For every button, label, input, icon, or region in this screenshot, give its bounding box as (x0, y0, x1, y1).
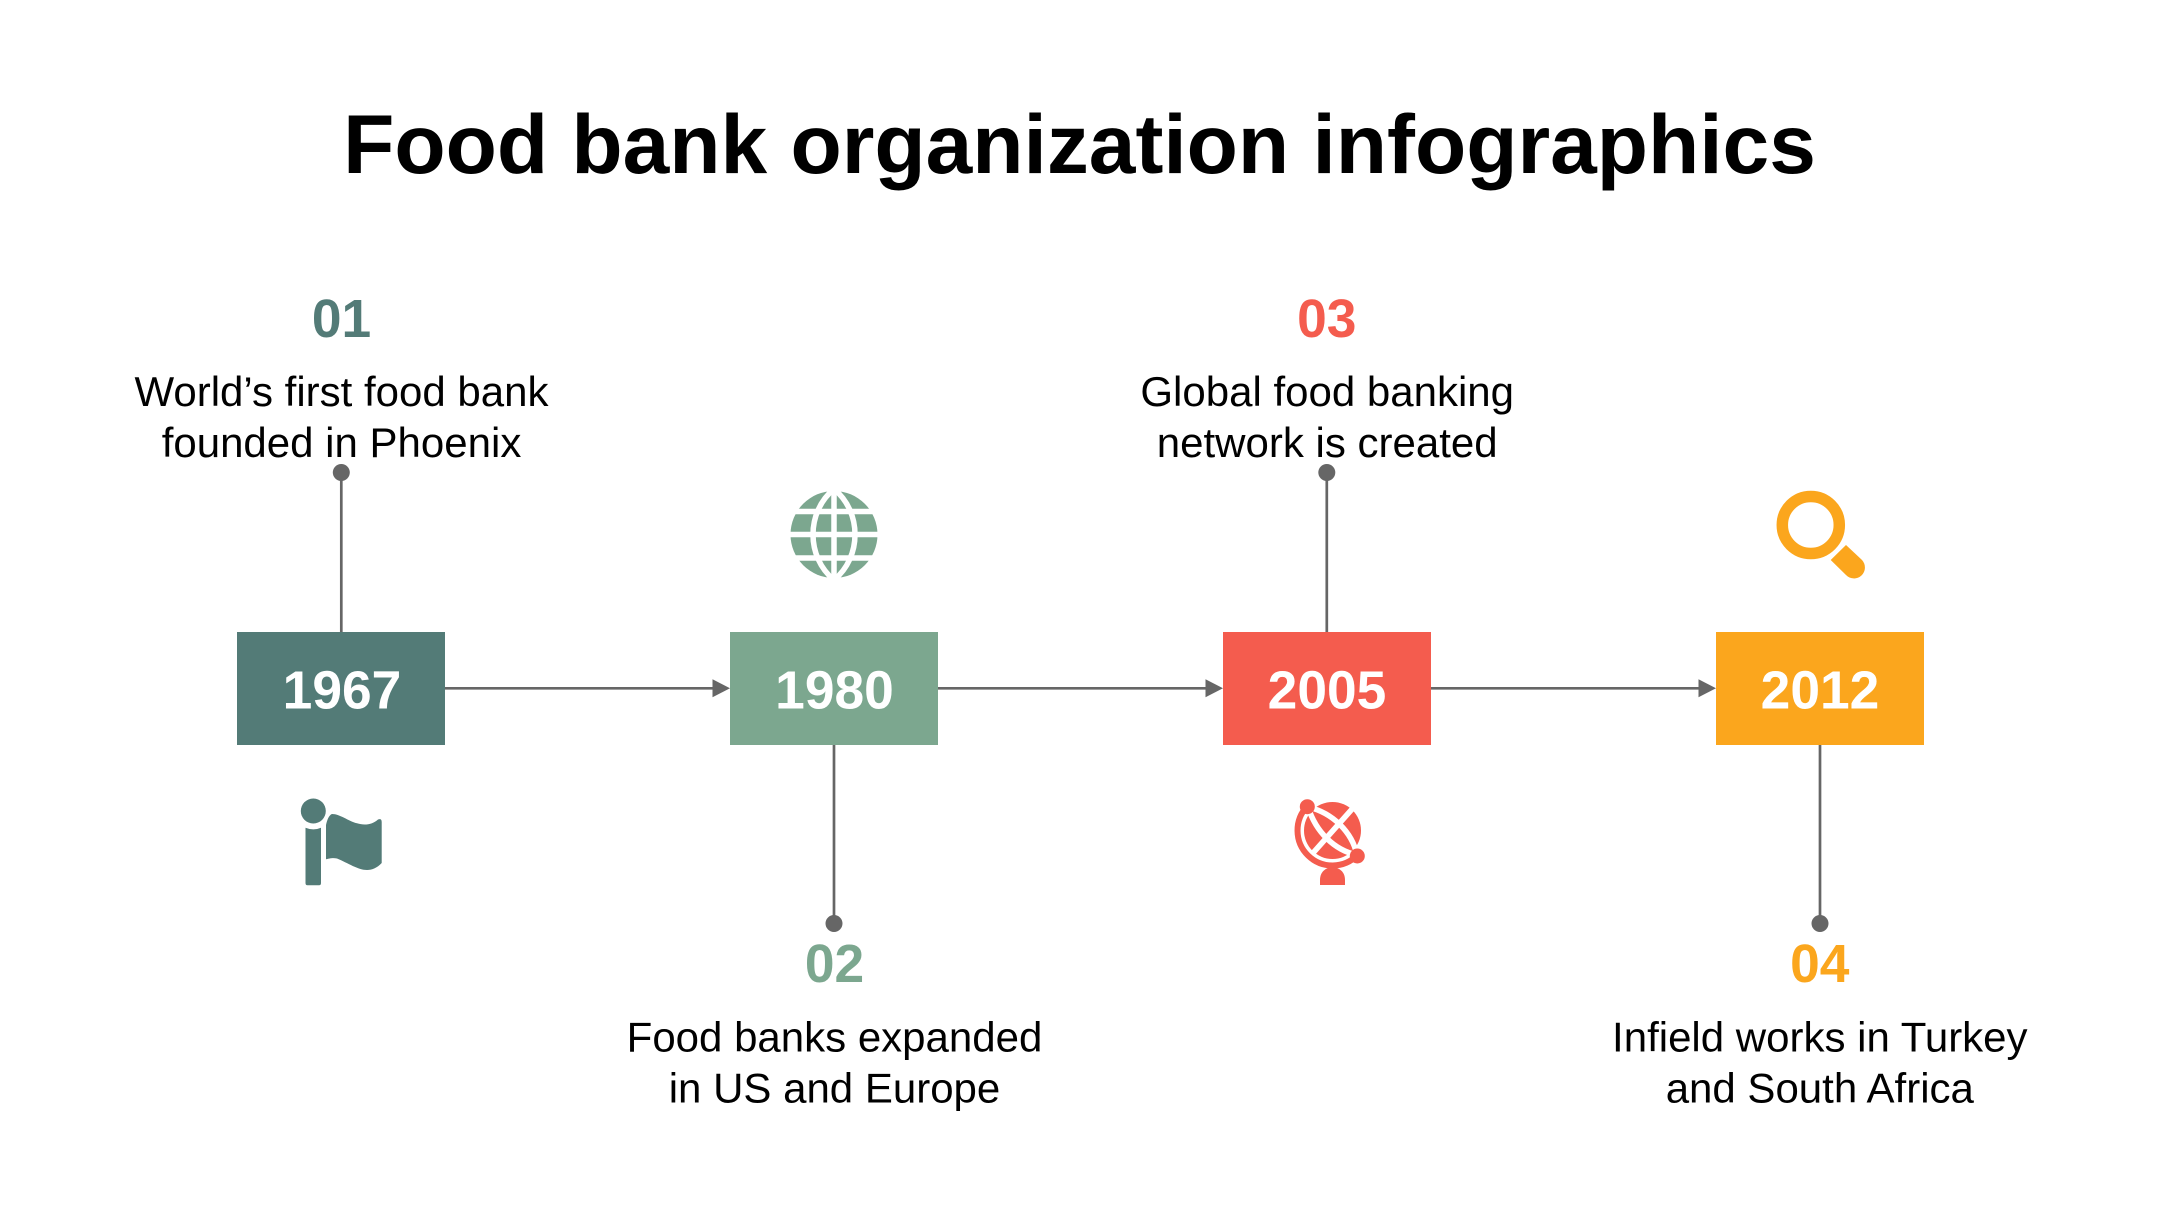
milestone 04 (1612, 496, 2028, 1112)
connector 01 (333, 464, 350, 632)
connector 02 (826, 745, 842, 932)
year box 1967: 1967 (283, 662, 401, 720)
year box 1980: 1980 (775, 662, 894, 720)
year box 1967 (237, 632, 445, 745)
description 04: and South Africa (1666, 1064, 1975, 1112)
description 02: in US and Europe (669, 1064, 1000, 1112)
number 04: 04 (1790, 935, 1850, 994)
icon: globe (789, 489, 879, 580)
description 01: founded in Phoenix (162, 419, 521, 466)
connector 04 (1812, 745, 1828, 932)
description 03: network is created (1157, 419, 1498, 466)
icon: flag (301, 798, 382, 885)
title: Food bank organization infographics (343, 97, 1816, 191)
icon: desk globe (1298, 799, 1365, 885)
description 01: World’s first food bank (135, 368, 549, 415)
year box 2012 (1716, 632, 1924, 745)
number 01: 01 (312, 290, 371, 349)
connector 03 (1318, 464, 1335, 632)
year box 2012: 2012 (1761, 662, 1879, 720)
icon: magnifying glass (1782, 496, 1865, 578)
milestone 03 (1140, 290, 1514, 885)
arrow: 1980 to 2005 (938, 679, 1223, 697)
arrow: 2005 to 2012 (1431, 679, 1716, 697)
year box 1980 (730, 632, 938, 745)
milestone 02 (627, 489, 1042, 1112)
year box 2005: 2005 (1268, 662, 1386, 720)
description 04: Infield works in Turkey (1612, 1014, 2028, 1060)
description 02: Food banks expanded (627, 1014, 1042, 1060)
year box 2005 (1223, 632, 1431, 745)
number 02: 02 (805, 935, 864, 994)
milestone 01 (135, 290, 549, 885)
description 03: Global food banking (1140, 368, 1514, 415)
arrow: 1967 to 1980 (445, 679, 730, 697)
number 03: 03 (1297, 290, 1356, 349)
